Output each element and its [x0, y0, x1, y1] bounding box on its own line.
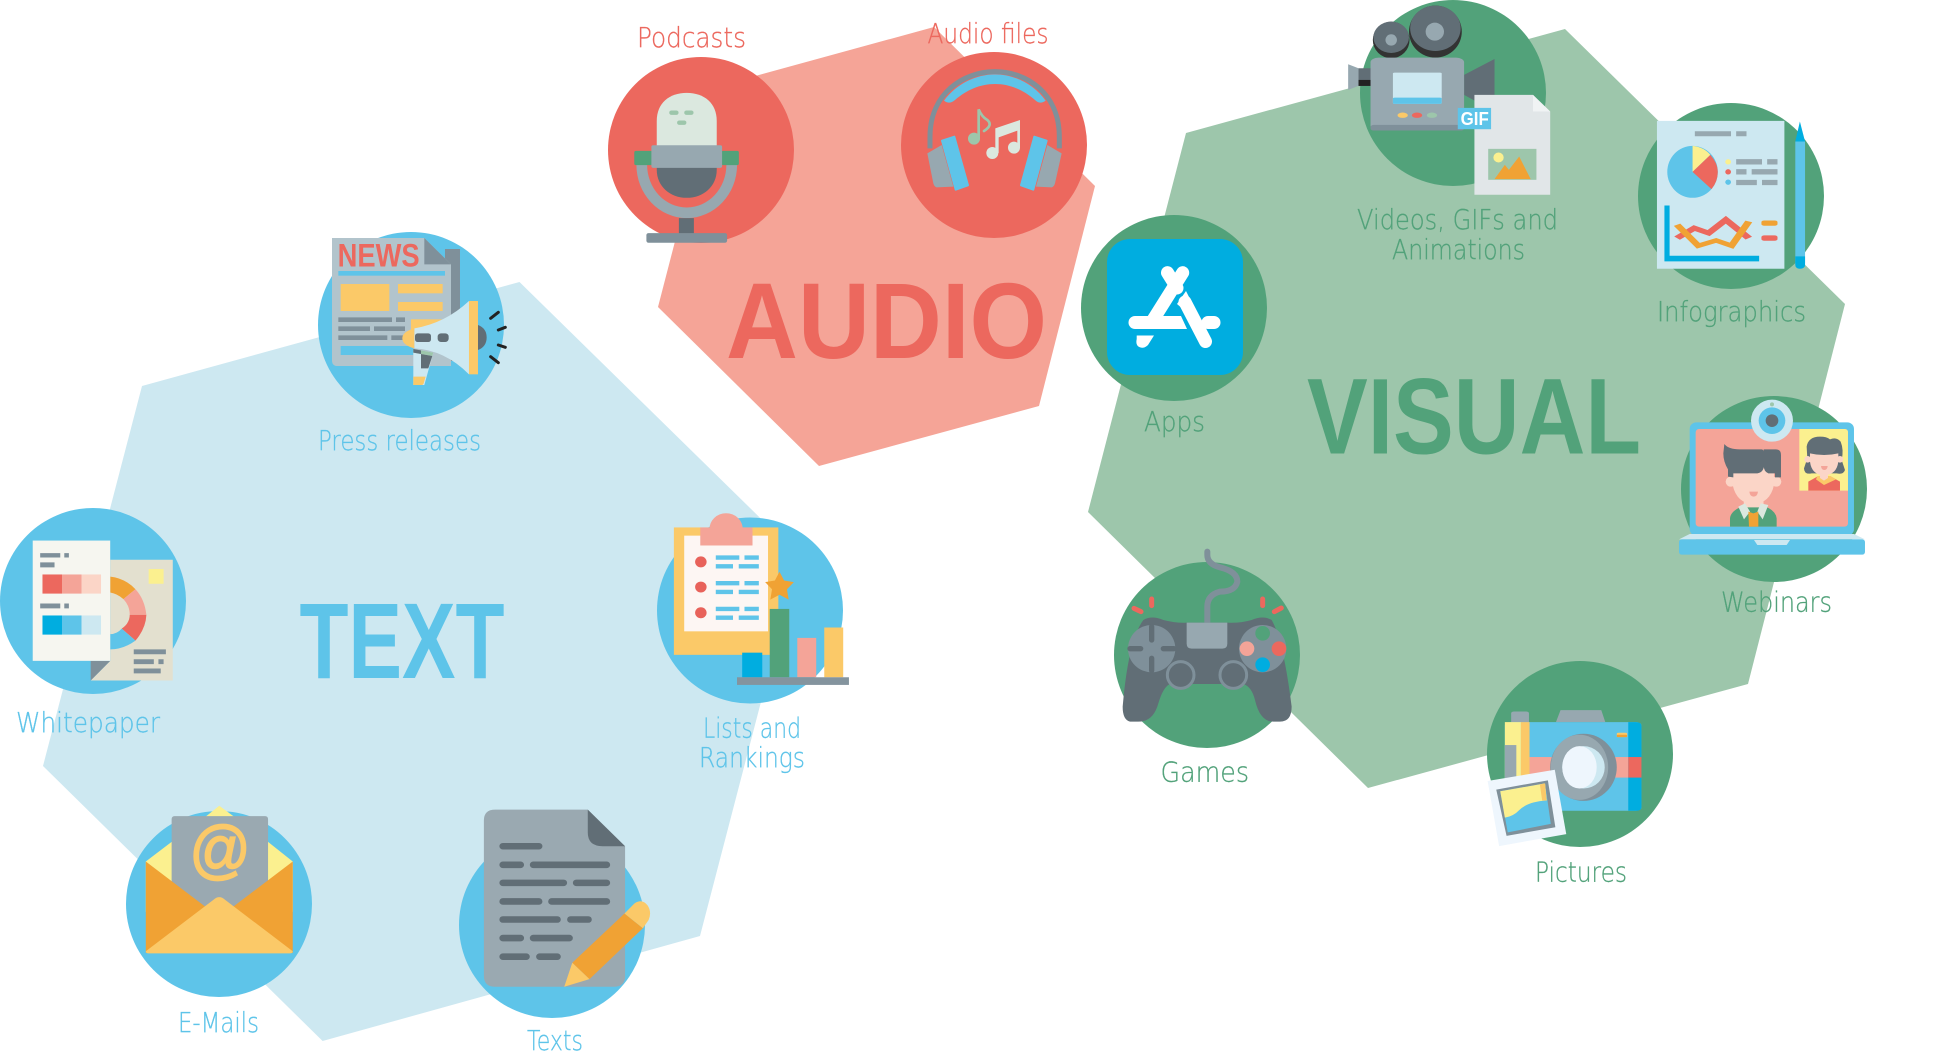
icon: microphone	[634, 93, 739, 243]
icon: app store	[1107, 239, 1243, 375]
icon: laptop video call	[1679, 400, 1865, 555]
panel: audio formats	[608, 17, 1095, 466]
icon circle: apps	[1081, 215, 1267, 401]
icon circle: press releases	[318, 232, 504, 418]
icon: newspaper and megaphone: NEWS	[338, 238, 420, 274]
item: games	[1114, 552, 1300, 788]
item: texts	[459, 810, 650, 1057]
icon circle: audio files	[901, 52, 1087, 238]
item: press releases	[318, 232, 505, 457]
label: whitepaper: Whitepaper	[16, 706, 160, 739]
label: texts: Texts	[527, 1024, 583, 1057]
icon: photo camera and print	[1488, 710, 1641, 846]
label: infographics: Infographics	[1657, 295, 1806, 328]
label: games: Games	[1160, 756, 1249, 788]
label: apps: Apps	[1144, 405, 1205, 438]
icon circle: texts	[459, 832, 645, 1018]
icon circle: podcasts	[608, 57, 794, 243]
item: podcasts	[608, 21, 794, 243]
label: audio files: Audio files	[928, 17, 1048, 50]
icon circle: webinars	[1681, 396, 1867, 582]
item: videos, GIFs and animations	[1348, 0, 1558, 266]
icon: infographic sheet and pen	[1657, 121, 1805, 269]
icon circle: whitepaper	[0, 508, 186, 694]
label: pictures: Pictures	[1535, 856, 1627, 888]
item: audio files	[901, 17, 1087, 238]
icon circle: games	[1114, 562, 1300, 748]
label: webinars: Webinars	[1721, 586, 1832, 618]
label: lists and rankings	[699, 712, 805, 774]
icon: headphones with notes	[927, 72, 1062, 190]
label: lists and rankings: Lists and	[703, 712, 801, 744]
label: podcasts: Podcasts	[637, 21, 746, 54]
item: lists and rankings	[657, 513, 849, 774]
hexagon: audio background	[658, 27, 1095, 466]
icon circle: infographics	[1638, 103, 1824, 289]
item: whitepaper	[0, 508, 186, 739]
label: lists and rankings: Rankings	[699, 741, 805, 774]
label: videos, GIFs and animations: Videos, GIFs and	[1357, 203, 1558, 236]
icon circle: videos	[1360, 0, 1546, 186]
item: pictures	[1487, 661, 1673, 888]
icon: open envelope: @	[189, 814, 251, 886]
label: videos, GIFs and animations	[1357, 203, 1558, 266]
heading: TEXT: TEXT	[300, 580, 504, 701]
label: e-mails: E-Mails	[178, 1006, 259, 1039]
item: e-mails	[126, 806, 312, 1039]
icon circle: pictures	[1487, 661, 1673, 847]
item: webinars	[1679, 396, 1867, 618]
panel: visual formats	[1081, 0, 1867, 888]
icon circle: lists and rankings	[657, 518, 843, 704]
heading: VISUAL: VISUAL	[1307, 356, 1641, 476]
icon: whitepaper documents	[33, 541, 173, 681]
icon: open envelope	[146, 806, 293, 953]
item: apps	[1081, 215, 1267, 438]
icon: movie camera and GIF file	[1348, 6, 1550, 195]
item: infographics	[1638, 103, 1824, 328]
icon: movie camera and GIF file: GIF	[1461, 108, 1489, 129]
icon: document and pencil	[484, 810, 650, 987]
label: videos, GIFs and animations: Animations	[1392, 233, 1525, 266]
icon: clipboard with bar chart	[674, 513, 849, 685]
icon: game controller	[1123, 552, 1292, 722]
heading: AUDIO: AUDIO	[726, 260, 1047, 381]
panel: text formats	[0, 232, 849, 1057]
hexagon: text background	[43, 282, 799, 1041]
icon circle: e-mails	[126, 811, 312, 997]
label: press releases: Press releases	[318, 424, 481, 457]
icon: newspaper and megaphone	[332, 238, 505, 385]
hexagon: visual background	[1088, 29, 1845, 788]
